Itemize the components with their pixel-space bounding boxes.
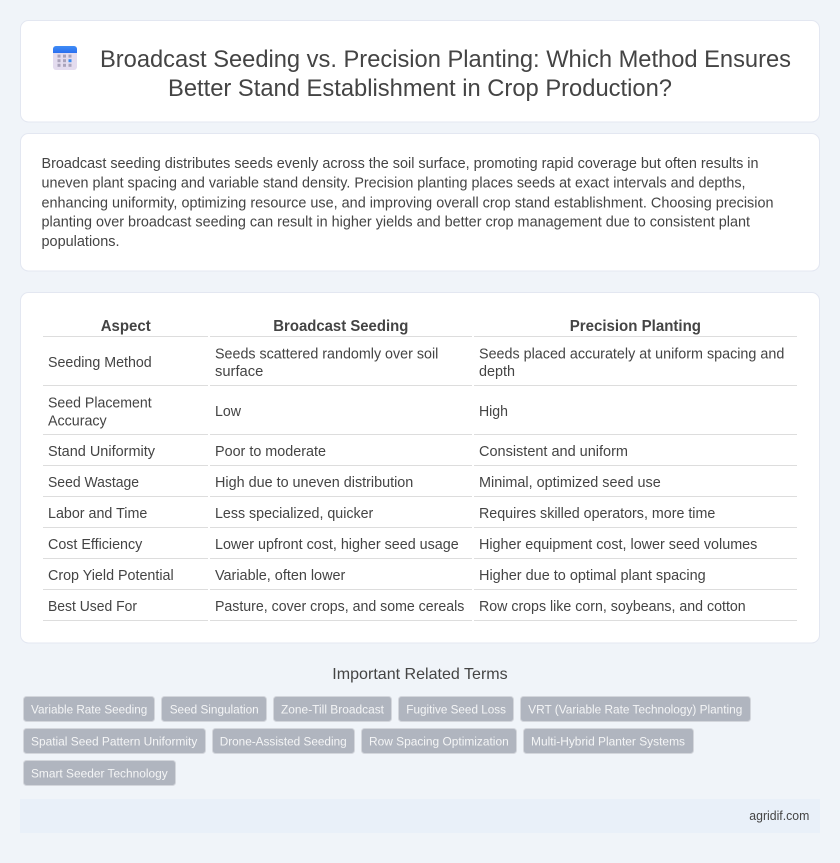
tag: drone-assisted seeding	[212, 728, 354, 754]
row: seeding method: depth	[479, 364, 515, 380]
tag: variable rate seeding	[24, 696, 154, 722]
tag: variable rate seeding: Variable Rate Seeding	[31, 702, 147, 716]
row: best used for	[43, 599, 797, 621]
row: best used for: Best Used For	[48, 599, 137, 615]
row: crop yield potential: Crop Yield Potential	[48, 568, 174, 584]
icon: calendar	[53, 46, 77, 70]
tag: seed singulation: Seed Singulation	[170, 702, 259, 716]
row: seed placement accuracy: High	[479, 404, 508, 420]
row: seed placement accuracy	[43, 396, 797, 435]
row: cost efficiency: Lower upfront cost, higher seed usage	[215, 537, 459, 553]
row: seed placement accuracy: Low	[215, 404, 242, 420]
tag: fugitive seed loss	[398, 696, 514, 722]
row: labor and time: Labor and Time	[48, 506, 147, 522]
row: crop yield potential: Variable, often lower	[215, 568, 346, 584]
paragraph: enhancing uniformity, optimizing resource use, and improving overall crop stand establishment. Choosing precision	[42, 196, 773, 212]
footer source: agridif.com	[749, 808, 809, 823]
row: stand uniformity: Poor to moderate	[215, 444, 326, 460]
row: best used for: Pasture, cover crops, and some cereals	[215, 599, 464, 615]
panel: title card	[20, 20, 820, 122]
heading: important related terms: Important Related Terms	[332, 666, 508, 683]
panel: comparison table	[20, 292, 820, 643]
table header row: Aspect	[101, 318, 151, 335]
row: seeding method: surface	[215, 364, 263, 380]
tag: zone-till broadcast	[274, 696, 392, 722]
row: cost efficiency: Cost Efficiency	[48, 537, 143, 553]
row: seeding method: Seeds scattered randomly over soil	[215, 346, 438, 362]
title: Broadcast Seeding vs. Precision Planting: Which Method Ensures	[100, 46, 791, 73]
title: Better Stand Establishment in Crop Production?	[168, 75, 672, 102]
tag: multi-hybrid planter systems: Multi-Hybrid Planter Systems	[531, 734, 685, 748]
table header row	[43, 318, 797, 337]
row: seed wastage: High due to uneven distribution	[215, 475, 413, 491]
tag: multi-hybrid planter systems	[524, 728, 694, 754]
tag: spatial seed pattern uniformity: Spatial Seed Pattern Uniformity	[31, 734, 198, 748]
row: stand uniformity: Stand Uniformity	[48, 444, 156, 460]
paragraph: Broadcast seeding distributes seeds evenly across the soil surface, promoting rapid coverage but often results in	[42, 156, 758, 172]
row: cost efficiency: Higher equipment cost, lower seed volumes	[479, 537, 757, 553]
table header row: Precision Planting	[570, 318, 701, 335]
tag: zone-till broadcast: Zone-Till Broadcast	[281, 702, 385, 716]
row: labor and time: Less specialized, quicker	[215, 506, 373, 522]
row: labor and time	[43, 506, 797, 528]
tag: row spacing optimization: Row Spacing Optimization	[369, 734, 509, 748]
tag: smart seeder technology	[24, 760, 176, 786]
row: seeding method: Seeding Method	[48, 355, 152, 371]
footer bar	[20, 799, 820, 833]
row: crop yield potential: Higher due to optimal plant spacing	[479, 568, 706, 584]
row: seed placement accuracy: Accuracy	[48, 413, 107, 429]
row: seed wastage: Seed Wastage	[48, 475, 139, 491]
panel: related term tags	[24, 696, 750, 786]
row: stand uniformity: Consistent and uniform	[479, 444, 628, 460]
tag: spatial seed pattern uniformity	[24, 728, 206, 754]
paragraph: planting over broadcast seeding can result in higher yields and better crop management due to consistent plant	[42, 214, 750, 230]
row: seed wastage: Minimal, optimized seed use	[479, 475, 661, 491]
table header row: Broadcast Seeding	[273, 318, 408, 335]
tag: smart seeder technology: Smart Seeder Technology	[31, 766, 168, 780]
row: crop yield potential	[43, 568, 797, 590]
row: best used for: Row crops like corn, soybeans, and cotton	[479, 599, 746, 615]
row: seed wastage	[43, 475, 797, 497]
paragraph: uneven plant spacing and variable stand density. Precision planting places seeds at exact intervals and depths,	[42, 176, 746, 192]
row: seeding method: Seeds placed accurately at uniform spacing and	[479, 346, 784, 362]
row: stand uniformity	[43, 444, 797, 466]
row: cost efficiency	[43, 537, 797, 559]
tag: vrt planting	[520, 696, 750, 722]
tag: drone-assisted seeding: Drone-Assisted Seeding	[220, 734, 347, 748]
tag: row spacing optimization	[362, 728, 516, 754]
tag: seed singulation	[162, 696, 266, 722]
row: seed placement accuracy: Seed Placement	[48, 396, 152, 412]
paragraph: populations.	[42, 234, 120, 250]
tag: vrt planting: VRT (Variable Rate Technology) Planting	[528, 702, 742, 716]
tag: fugitive seed loss: Fugitive Seed Loss	[406, 702, 506, 716]
row: labor and time: Requires skilled operators, more time	[479, 506, 715, 522]
panel: introduction text	[20, 134, 820, 271]
row: seeding method	[43, 346, 797, 386]
